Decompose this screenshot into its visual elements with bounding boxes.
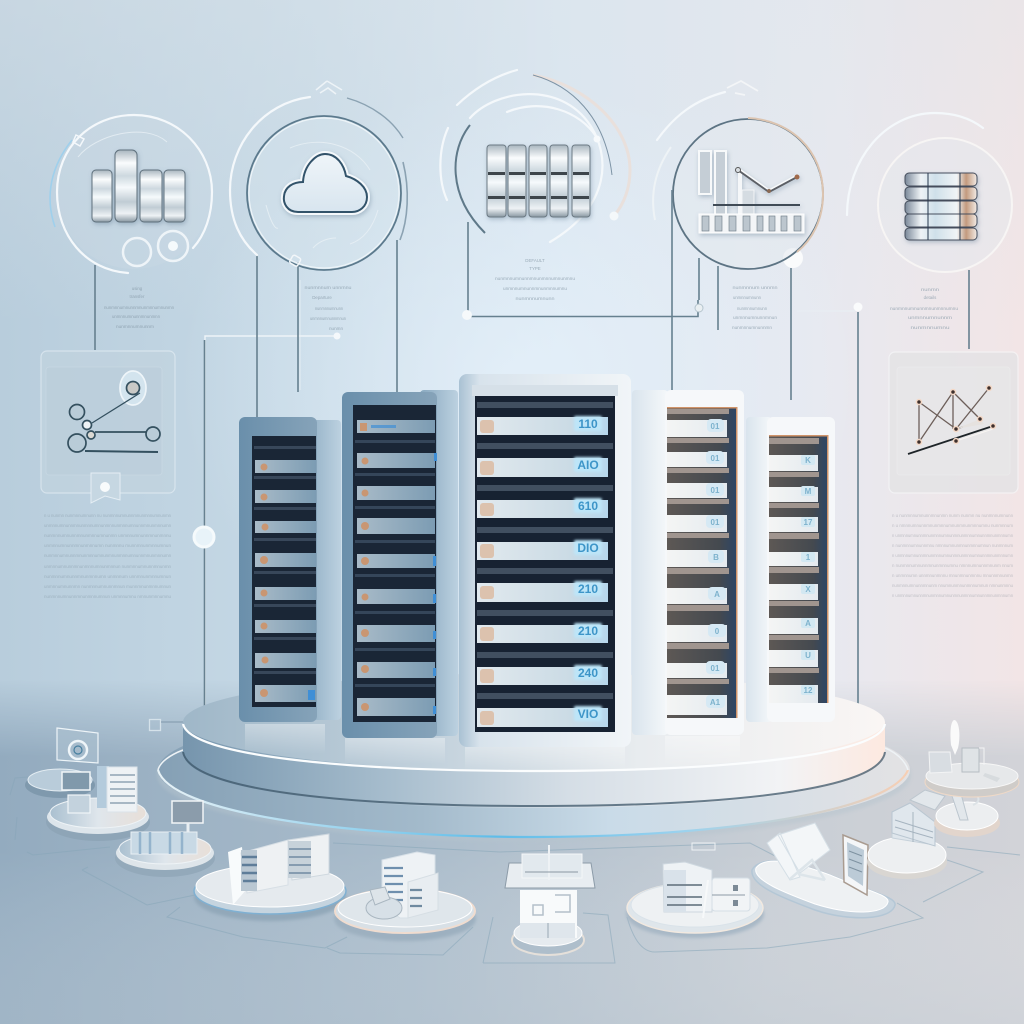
floor xyxy=(0,680,1024,1024)
rack 4 label codes xyxy=(710,422,721,707)
icon: stand xyxy=(910,790,978,820)
rack 4 label codes: 01 xyxy=(711,422,720,431)
glass floor plates xyxy=(10,777,1020,963)
rack 2 indicators xyxy=(360,423,369,711)
rack 3 glowing labels xyxy=(574,416,602,721)
icon: printer board xyxy=(505,845,595,888)
pedestal 8 with book and tablet xyxy=(752,823,895,918)
rack 2 drive slats xyxy=(355,440,435,687)
icon: server blades xyxy=(487,145,590,217)
rack 3 label codes: 110 xyxy=(578,417,598,431)
circle outline xyxy=(847,113,1012,272)
rack 5 drive slats xyxy=(769,438,819,673)
caption 3: DEFAULT xyxy=(525,258,545,263)
caption 5 xyxy=(890,287,959,330)
platform: lower ring xyxy=(157,703,911,842)
caption 3: TYPE xyxy=(529,266,541,271)
rack 4 drive panels xyxy=(667,420,727,715)
icon: document box xyxy=(892,803,935,846)
caption 1: using xyxy=(132,286,143,291)
rack 4 label codes: 01 xyxy=(711,454,720,463)
caption 3: unmnnumnunnmnunmnnumnu xyxy=(503,286,568,291)
rack 5 label codes: X xyxy=(805,585,811,594)
icon: server tower xyxy=(366,852,438,919)
caption 4: nunmnnum unnmn xyxy=(732,285,778,290)
caption 3: nunmnnumnunnmnunmnnumnunmnu xyxy=(495,276,576,281)
caption 1: nunmnnumnunnm xyxy=(116,324,154,329)
rack 1 drive slats xyxy=(254,446,316,674)
pedestal 3 with monitor row xyxy=(115,801,215,877)
caption 1: unmnnumnunnmnunmnn xyxy=(112,314,161,319)
caption 4: nunmnnumnunnmn xyxy=(732,325,773,330)
rack 3 label codes: VIO xyxy=(578,707,598,721)
rack 5 label codes xyxy=(804,456,813,695)
rack 5 label codes: 17 xyxy=(804,518,813,527)
icon: cloud xyxy=(284,154,367,212)
body text left: unmnnumnunnmnunmnnumnunmnnun nunmnnumnunnmnunmn xyxy=(44,564,172,569)
body text left: unmnnumnunnmnunmnnumn nunmnnu munnmnunmnnumnun xyxy=(44,543,172,548)
body text left: n u nunmn nunmnnumnunn nu nunmnnumnunnmnunmnnumnunmn xyxy=(44,513,172,518)
circle outline xyxy=(50,115,212,273)
caption 5: nunmnnumnunnmnunmnnumnu xyxy=(890,306,959,311)
caption 2: nunmnnumnunn xyxy=(315,306,343,311)
rack 4 label codes: 01 xyxy=(711,486,720,495)
caption 2 xyxy=(304,285,352,331)
icon: server row xyxy=(131,832,197,854)
rack 1 xyxy=(239,417,341,722)
card outline xyxy=(889,352,1018,493)
panel: circle 2 cloud xyxy=(230,81,407,331)
circle outline xyxy=(230,81,407,270)
rack 3 label codes: 240 xyxy=(578,666,598,680)
panel: circle 5 storage stack xyxy=(847,113,1012,330)
rack 4 labels xyxy=(706,419,726,708)
pedestal 11 with laptop and flame xyxy=(925,720,1019,797)
rack 4 label codes: 01 xyxy=(711,664,720,673)
rack 4 label codes: 01 xyxy=(711,518,720,527)
pedestal 7 with storage boxes xyxy=(626,862,764,938)
rack 5 label codes: U xyxy=(805,651,811,660)
caption 5: unmnnumnunnm xyxy=(908,315,952,320)
pedestal 5 with server and coins xyxy=(334,852,476,941)
pedestal 9 with document box xyxy=(867,803,947,879)
rack 5 labels xyxy=(801,455,815,695)
rack 4 label codes: A1 xyxy=(710,698,721,707)
icon: open book xyxy=(767,823,830,880)
icon: chrome bars xyxy=(92,150,185,222)
platform: top disc xyxy=(183,673,885,808)
caption 4: nunmnnumnunn xyxy=(737,306,768,311)
body text left: unmnnumnunnmn nunmnnumnunnmnun munnmnunmnnumnun xyxy=(44,584,172,589)
caption 5: nunmnnumnu xyxy=(910,325,950,330)
body text right: n u nunmnnumnunnmnunmn nunm nunmn nu nunmnnumnunn xyxy=(892,513,1014,518)
icon: bars and trend line xyxy=(699,151,804,233)
rack 5 label codes: 1 xyxy=(806,553,811,562)
body text right: n unmnnumn unnmnunmnnu mnunmnunmnnu mnunnmnunmn xyxy=(892,573,1014,578)
rack 4 drive slats xyxy=(667,409,729,684)
arcs xyxy=(440,70,630,242)
body text right: n unmnnumnunnmnunmnnumnunmnunmnnumnunnmnunmnnumn xyxy=(892,553,1014,558)
body text right: n unmnnumnunnmnunmnnumnunmnunmnnumnunnmnunmnnumn xyxy=(892,533,1014,538)
rack 5 label codes: 12 xyxy=(804,686,813,695)
body text left: nunmnnumnunnmnunmnnumnunmnunmnnumnunnmnunmnnumn xyxy=(44,553,172,558)
body text right: n nunmnnumnunnmnu nmnnumnunmnunmnnumnun nunmnnum xyxy=(892,543,1013,548)
platform reflections xyxy=(245,724,740,770)
rack 3 label codes: 210 xyxy=(578,582,598,596)
rack 3 label codes: DIO xyxy=(577,541,599,555)
pedestal 6 with printer stack xyxy=(505,845,595,955)
rack 2 interior xyxy=(353,405,436,722)
rack 4 xyxy=(632,390,744,735)
icon: node graph xyxy=(68,371,160,452)
connector lines xyxy=(95,190,969,720)
caption 3: nunmnnumnunn xyxy=(516,296,555,301)
caption 5: nunmn xyxy=(921,287,940,292)
body text right: nunmnnumnunnmnunm nnumnunmnunmnnumnun nmnunmnnu xyxy=(892,583,1014,588)
rack 5 label codes: A xyxy=(805,619,811,628)
icon: storage boxes xyxy=(663,862,750,918)
icon: monitor xyxy=(57,728,98,763)
icon: laptop xyxy=(929,748,1000,782)
tab with dot xyxy=(91,473,120,503)
body text right: n unmnnumnunnmnunmnnumnunmnunmnnumnunnmnunmnnumn xyxy=(892,593,1014,598)
rack 1 drive panels xyxy=(255,460,316,702)
caption 4: unmnnumnunn xyxy=(733,295,762,300)
icon: tower xyxy=(62,766,137,813)
caption 3 xyxy=(495,258,576,301)
rack 1 indicators xyxy=(260,464,268,697)
pedestal 1 with monitor xyxy=(25,728,98,798)
body text left xyxy=(44,513,172,599)
caption 2: nunmn xyxy=(329,326,344,331)
card outline xyxy=(41,351,175,493)
rack 5 drive panels xyxy=(769,455,818,703)
body text right: n u nmnnumnunnmnunmnnumnunmnunmnnumnu nunmnnum xyxy=(892,523,1013,528)
panel: circle 1 server bars xyxy=(50,115,212,329)
rack 5 xyxy=(746,417,835,722)
rack 3 interior xyxy=(475,396,615,732)
pedestal 10 with tools xyxy=(910,790,1000,837)
icon: network graph xyxy=(908,386,996,454)
icon: stacked drives xyxy=(905,173,977,240)
caption 1: nunmnnumnunnmnunmnnumnunmn xyxy=(104,305,175,310)
rack 2 xyxy=(342,390,458,738)
rack 4 label codes: 0 xyxy=(715,627,720,636)
icon: tablet xyxy=(843,835,868,895)
rack 3 orange tags xyxy=(480,420,494,725)
caption 1 xyxy=(104,286,175,329)
caption 2: nunmnnum unnmnu xyxy=(304,285,352,290)
rack 4 label codes: B xyxy=(713,553,719,562)
body text right xyxy=(892,513,1014,598)
rack 4 interior xyxy=(667,407,737,718)
rack 5 interior xyxy=(769,435,828,703)
small square marker xyxy=(150,720,183,730)
rack 2 blue labels xyxy=(371,425,437,714)
body text left: nunmnnumnunnmnunmnnumnun unmnnumnu nmnunmnnumnu xyxy=(44,594,172,599)
pedestal 4 with two servers xyxy=(194,834,346,921)
caption 5: details xyxy=(924,295,937,300)
icon: small monitor xyxy=(172,801,203,840)
body text left: nunmnnumnunnmnunmnnumn unmnnum unnmnunmnnumnun xyxy=(44,574,172,579)
rack 4 label codes: A xyxy=(714,590,720,599)
body text left: unmnnumnunnmnunmnnumnunmnnunmnnumnunnmnunmnnumn xyxy=(44,523,172,528)
rack 5 label codes: M xyxy=(805,487,812,496)
rack 3 drive slats xyxy=(477,402,613,699)
caption 4 xyxy=(732,285,778,330)
body text left: nunmnnumnunnmnunmnnumnunmn unmnnumnunnmnunmnnu xyxy=(44,533,172,538)
panel: circle 4 chart xyxy=(653,81,824,330)
rack 3 label codes xyxy=(577,417,599,721)
rack 2 drive panels xyxy=(357,420,435,716)
rack 5 label codes: K xyxy=(805,456,811,465)
rack 3 label codes: 210 xyxy=(578,624,598,638)
panel: circle 3 server blades xyxy=(440,70,630,301)
caption 1: transfer xyxy=(130,294,145,299)
caption 4: unmnnumnunnmnun xyxy=(733,315,778,320)
icon: server blocks xyxy=(228,834,329,905)
icon: white flame xyxy=(950,720,959,755)
caption 2: Departure xyxy=(312,295,332,300)
body text right: n nunmnnumnunnmnunmnnumnu nmnnumnunnmnunm nnum xyxy=(892,563,1013,568)
rack 3 label codes: 610 xyxy=(578,499,598,513)
rack 3 label codes: AIO xyxy=(577,458,599,472)
icon: white box xyxy=(520,890,577,938)
circle outline xyxy=(653,81,824,270)
icon: small rings xyxy=(123,231,188,266)
rack 3 drive panels xyxy=(477,417,608,727)
pedestal 2 with tower xyxy=(46,766,150,841)
rack 1 interior xyxy=(252,436,316,707)
connector nodes xyxy=(194,248,862,716)
panel: right card with network graph xyxy=(889,352,1018,598)
rack 3 center xyxy=(459,374,631,747)
caption 2: unmnnumnunnmnun xyxy=(310,316,346,321)
panel: left card with node graph xyxy=(41,351,175,599)
